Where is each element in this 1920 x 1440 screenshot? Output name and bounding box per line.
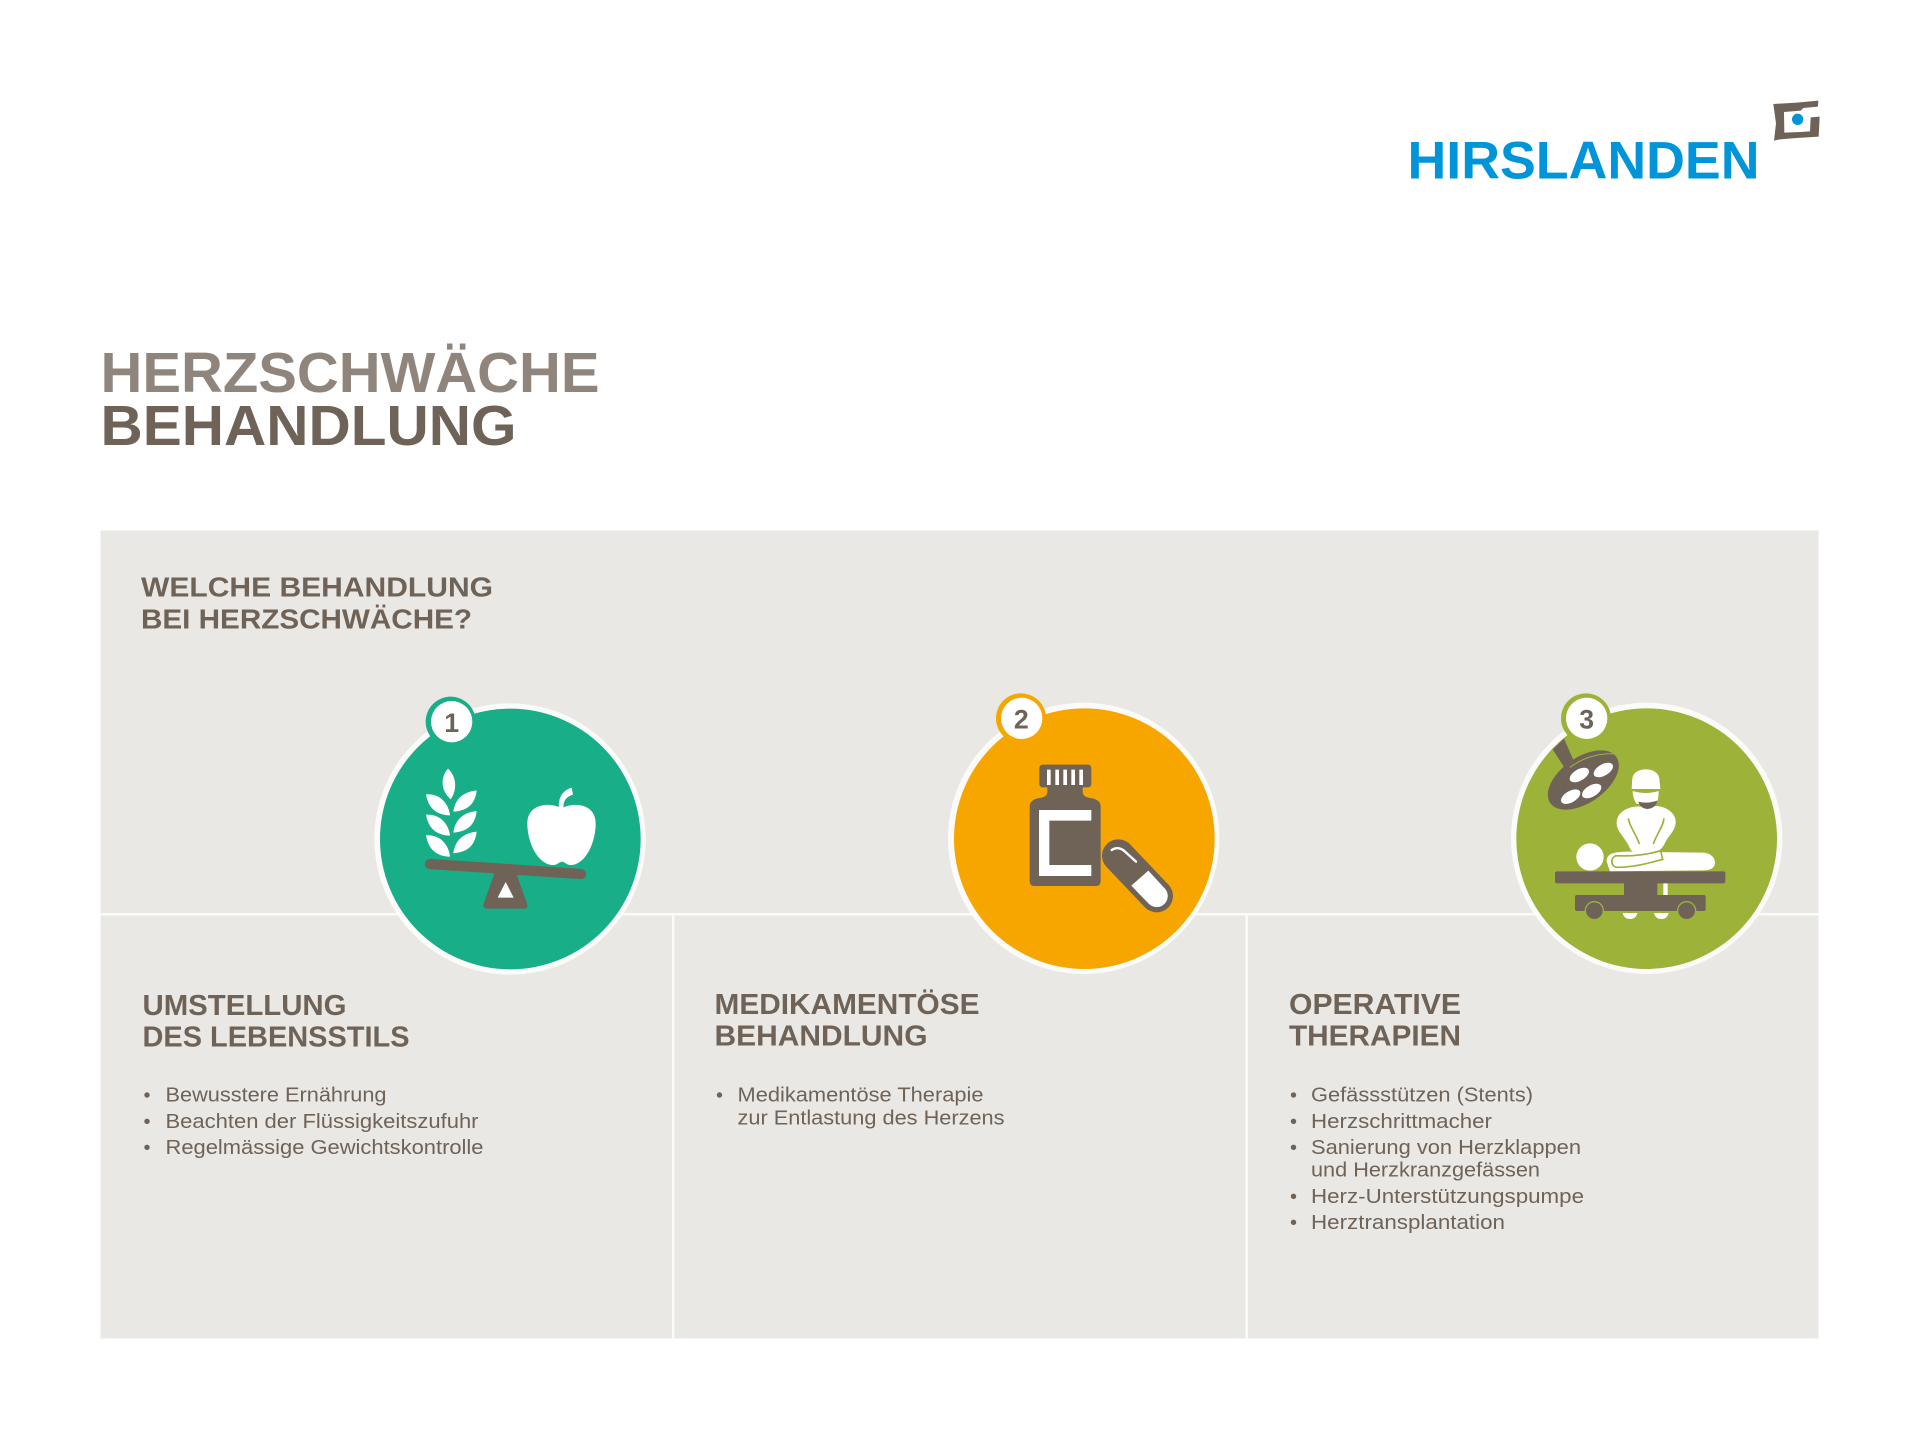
heading: BEHANDLUNG xyxy=(714,1020,928,1052)
badge 3 xyxy=(1561,693,1611,743)
heading xyxy=(1289,989,1461,1052)
icon: circle with surgeon, patient and lamp xyxy=(1511,693,1782,974)
logo wordmark: HIRSLANDEN xyxy=(1408,131,1760,190)
badge 1 xyxy=(426,697,476,747)
list: und Herzkranzgefässen xyxy=(1311,1160,1540,1182)
list xyxy=(144,1085,484,1159)
bottle xyxy=(1030,765,1101,886)
seesaw xyxy=(430,864,581,909)
icon: circle with bottle and capsule xyxy=(948,693,1219,974)
list: Regelmässige Gewichtskontrolle xyxy=(166,1137,484,1159)
wheat xyxy=(426,769,477,857)
heading xyxy=(142,990,410,1054)
list xyxy=(1291,1085,1584,1234)
badge 1: 1 xyxy=(444,708,459,738)
list: Herz-Unterstützungspumpe xyxy=(1311,1186,1584,1208)
surgeon xyxy=(1617,769,1676,853)
panel heading: BEI HERZSCHWÄCHE? xyxy=(141,603,472,634)
list xyxy=(717,1085,1004,1129)
panel heading xyxy=(141,572,493,634)
list: Sanierung von Herzklappen xyxy=(1311,1137,1581,1159)
list: Herzschrittmacher xyxy=(1311,1111,1492,1133)
badge 3: 3 xyxy=(1579,704,1594,734)
list: Bewusstere Ernährung xyxy=(166,1085,386,1107)
badge 2: 2 xyxy=(1014,704,1029,734)
heading: UMSTELLUNG xyxy=(142,990,346,1022)
heading: DES LEBENSSTILS xyxy=(142,1022,410,1054)
capsule xyxy=(1112,848,1168,907)
title: BEHANDLUNG xyxy=(100,394,516,458)
heading xyxy=(714,989,980,1052)
list: Medikamentöse Therapie xyxy=(738,1085,984,1107)
title: HERZSCHWÄCHE xyxy=(100,341,600,405)
icon: circle with wheat, apple and seesaw xyxy=(374,697,646,975)
list: Herztransplantation xyxy=(1311,1212,1505,1234)
panel: lifestyle xyxy=(142,697,646,1159)
heading: THERAPIEN xyxy=(1289,1020,1461,1052)
patient xyxy=(1576,843,1715,896)
title xyxy=(100,341,600,458)
list: Gefässstützen (Stents) xyxy=(1311,1085,1533,1107)
badge 2 xyxy=(996,693,1046,743)
logo mark xyxy=(1773,101,1820,141)
panel heading: WELCHE BEHANDLUNG xyxy=(141,572,493,603)
list: Beachten der Flüssigkeitszufuhr xyxy=(166,1111,479,1133)
panel: surgery xyxy=(1289,693,1782,1234)
heading: OPERATIVE xyxy=(1289,989,1461,1021)
apple xyxy=(527,788,596,865)
operating table xyxy=(1555,871,1725,920)
heading: MEDIKAMENTÖSE xyxy=(714,989,980,1021)
lamp xyxy=(1537,738,1629,822)
panel background xyxy=(100,530,1818,1338)
logo: Hirslanden xyxy=(1408,101,1820,190)
list: zur Entlastung des Herzens xyxy=(738,1107,1004,1129)
panel: medication xyxy=(714,693,1219,1129)
